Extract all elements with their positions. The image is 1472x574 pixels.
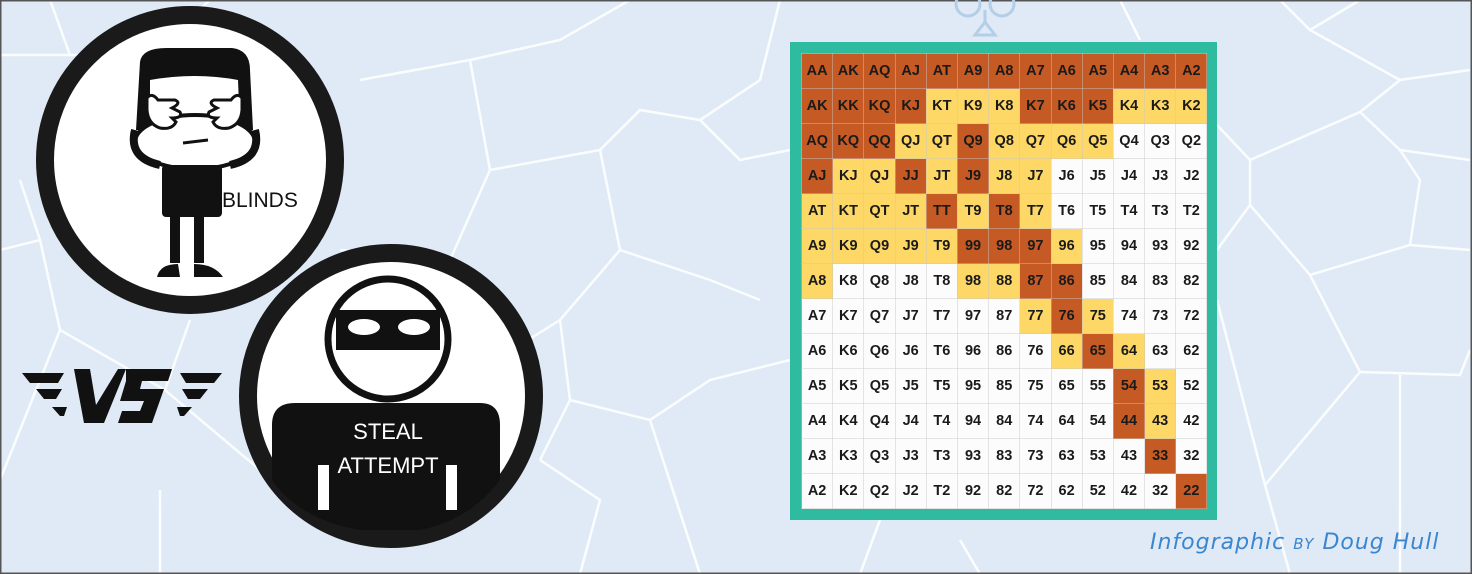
chart: starting hand range grid: T7 [933,308,950,324]
chart: starting hand range grid: 84 [996,413,1012,429]
chart: starting hand range grid: QJ [870,168,889,184]
chart: starting hand range grid: A8 [995,63,1013,79]
chart: starting hand range grid: 65 [1090,343,1106,359]
chart: starting hand range grid: 54 [1121,378,1137,394]
chart: starting hand range grid: 72 [1027,483,1043,499]
chart: starting hand range grid: A8 [808,273,826,289]
chart: starting hand range grid: J6 [903,343,919,359]
chart: starting hand range grid: 87 [996,308,1012,324]
credit: infographic by Doug Hull: Infographic BY Doug Hull [1150,530,1439,555]
chart: starting hand range grid: 75 [1090,308,1106,324]
chart: starting hand range grid: 98 [996,238,1012,254]
chart: starting hand range grid: AA [807,63,828,79]
chart: starting hand range grid: A4 [1120,63,1138,79]
chart: starting hand range grid: KT [932,98,952,114]
chart: starting hand range grid: Q3 [870,448,889,464]
chart: starting hand range grid: A2 [808,483,826,499]
chart: starting hand range grid: KJ [839,168,858,184]
chart: starting hand range grid: 32 [1183,448,1199,464]
chart: starting hand range grid: A7 [1026,63,1045,79]
chart: starting hand range grid: 53 [1152,378,1168,394]
chart: starting hand range grid: 66 [1059,343,1075,359]
chart: starting hand range grid: 72 [1183,308,1199,324]
chart: starting hand range grid: K4 [839,413,858,429]
chart: starting hand range grid: T7 [1027,203,1044,219]
chart: starting hand range grid: K5 [839,378,858,394]
chart: starting hand range grid: AQ [806,133,828,149]
chart: starting hand range grid: J7 [903,308,919,324]
chart: starting hand range grid: 86 [1059,273,1075,289]
chart: starting hand range grid: 33 [1152,448,1168,464]
chart: starting hand range grid: T4 [933,413,950,429]
chart: starting hand range grid: AQ [869,63,890,79]
chart: starting hand range grid: K7 [839,308,858,324]
chart: starting hand range grid: AT [808,203,826,219]
chart: starting hand range grid: 64 [1059,413,1075,429]
chart: starting hand range grid: 63 [1152,343,1168,359]
chart: starting hand range grid: 76 [1059,308,1075,324]
chart: starting hand range grid: 76 [1027,343,1043,359]
chart: starting hand range grid: J5 [1090,168,1106,184]
chart: starting hand range grid: 84 [1121,273,1137,289]
chart: starting hand range grid: 92 [1183,238,1199,254]
icon: masked robber [272,279,500,530]
chart: starting hand range grid: T8 [996,203,1013,219]
chart: starting hand range grid: 82 [1183,273,1199,289]
chart: starting hand range grid: KQ [869,98,890,114]
chart: starting hand range grid: Q3 [1150,133,1170,149]
chart: starting hand range grid: JT [902,203,919,219]
chart: starting hand range grid: 73 [1152,308,1168,324]
chart: starting hand range grid: T6 [1058,203,1075,219]
chart: starting hand range grid: 87 [1027,273,1043,289]
chart: starting hand range grid: 64 [1121,343,1137,359]
chart: starting hand range grid: 96 [965,343,981,359]
chart: starting hand range grid: Q4 [870,413,889,429]
chart: starting hand range grid: T2 [933,483,950,499]
chart: starting hand range grid: T9 [965,203,981,219]
chart: starting hand range grid: K9 [964,98,982,114]
chart: starting hand range grid: Q6 [870,343,889,359]
chart: starting hand range grid: 65 [1059,378,1075,394]
chart: starting hand range grid: K8 [839,273,858,289]
chart: starting hand range grid: J2 [1183,168,1199,184]
chart: starting hand range grid: A9 [808,238,826,254]
chart: starting hand range grid: 93 [1152,238,1168,254]
chart: starting hand range grid: 85 [996,378,1012,394]
chart: starting hand range grid: 62 [1183,343,1199,359]
chart: starting hand range grid: J7 [1027,168,1043,184]
chart: starting hand range grid: Q8 [995,133,1014,149]
icon: VS emblem [22,369,222,423]
chart: starting hand range grid: K7 [1026,98,1045,114]
chart: starting hand range grid: K2 [1182,98,1201,114]
chart: starting hand range grid: A7 [808,308,826,324]
chart: starting hand range grid: J4 [903,413,919,429]
label: BLINDS: BLINDS [222,189,298,212]
chart: starting hand range grid: J2 [903,483,919,499]
chart: starting hand range grid: JT [933,168,950,184]
chart: starting hand range grid: T8 [933,273,950,289]
chart: starting hand range grid: 86 [996,343,1012,359]
chart: starting hand range grid: T5 [933,378,950,394]
chart: starting hand range grid: K3 [1151,98,1169,114]
chart: starting hand range grid: Q7 [870,308,889,324]
chart: starting hand range grid: KT [839,203,858,219]
chart: starting hand range grid: J3 [903,448,919,464]
chart: starting hand range grid: 92 [965,483,981,499]
chart: starting hand range grid: J9 [965,168,981,184]
chart: starting hand range grid: K5 [1088,98,1107,114]
chart: starting hand range grid: 55 [1090,378,1106,394]
chart: starting hand range grid: T6 [933,343,950,359]
chart: starting hand range grid: Q2 [1182,133,1201,149]
chart: starting hand range grid: T4 [1120,203,1137,219]
chart: starting hand range grid: Q6 [1057,133,1076,149]
chart: starting hand range grid: J6 [1059,168,1075,184]
chart: starting hand range grid: A6 [1057,63,1076,79]
chart: starting hand range grid: A3 [1151,63,1169,79]
chart: starting hand range grid: T9 [933,238,950,254]
chart: starting hand range grid: 42 [1183,413,1199,429]
chart: starting hand range grid: AK [807,98,828,114]
chart: starting hand range grid: 83 [996,448,1012,464]
chart: starting hand range grid: Q9 [963,133,983,149]
chart: starting hand range grid: J9 [903,238,919,254]
chart: starting hand range grid: AJ [901,63,920,79]
chart: starting hand range grid: AK [838,63,859,79]
chart: starting hand range grid: 95 [965,378,981,394]
chart: starting hand range grid: 63 [1059,448,1075,464]
chart: starting hand range grid: QQ [868,133,891,149]
chart: starting hand range grid: K8 [995,98,1013,114]
chart: starting hand range grid: 99 [965,238,981,254]
chart: starting hand range grid [790,42,1217,520]
chart: starting hand range grid: 96 [1059,238,1075,254]
chart: starting hand range grid: 98 [965,273,981,289]
chart: starting hand range grid: 94 [965,413,981,429]
chart: starting hand range grid: A4 [808,413,826,429]
chart: starting hand range grid: KQ [837,133,859,149]
chart: starting hand range grid: Q5 [870,378,889,394]
chart: starting hand range grid: K9 [839,238,858,254]
chart: starting hand range grid: Q8 [870,273,889,289]
chart: starting hand range grid: 75 [1027,378,1043,394]
chart: starting hand range grid: 22 [1183,483,1199,499]
chart: starting hand range grid: 83 [1152,273,1168,289]
chart: starting hand range grid: J8 [903,273,919,289]
chart: starting hand range grid: A5 [808,378,826,394]
chart: starting hand range grid: 85 [1090,273,1106,289]
chart: starting hand range grid: 94 [1121,238,1137,254]
chart: starting hand range grid: Q2 [870,483,889,499]
label: STEAL ATTEMPT: ATTEMPT [337,453,439,478]
chart: starting hand range grid: T3 [933,448,950,464]
chart: starting hand range grid: A3 [808,448,826,464]
chart: starting hand range grid: A6 [808,343,826,359]
chart: starting hand range grid: K6 [839,343,858,359]
chart: starting hand range grid: 93 [965,448,981,464]
chart: starting hand range grid: JJ [903,168,919,184]
chart: starting hand range grid: 62 [1059,483,1075,499]
chart: starting hand range grid: 32 [1152,483,1168,499]
chart: starting hand range grid: 82 [996,483,1012,499]
label: STEAL ATTEMPT: STEAL [353,419,423,444]
chart: starting hand range grid: 77 [1027,308,1043,324]
chart: starting hand range grid: J8 [996,168,1012,184]
icon: club suit watermark [954,0,1016,36]
chart: starting hand range grid: 95 [1090,238,1106,254]
chart: starting hand range grid: 42 [1121,483,1137,499]
chart: starting hand range grid: KK [838,98,859,114]
chart: starting hand range grid: K2 [839,483,858,499]
chart: starting hand range grid: 53 [1090,448,1106,464]
chart: starting hand range grid: 43 [1152,413,1168,429]
chart: starting hand range grid: T5 [1089,203,1106,219]
chart: starting hand range grid: KJ [901,98,920,114]
chart: starting hand range grid: Q7 [1026,133,1045,149]
chart: starting hand range grid: 52 [1090,483,1106,499]
chart: starting hand range grid: J3 [1152,168,1168,184]
chart: starting hand range grid: 73 [1027,448,1043,464]
panel: steal attempt character [239,244,543,548]
chart: starting hand range grid: 44 [1121,413,1137,429]
chart: starting hand range grid: T2 [1183,203,1200,219]
chart: starting hand range grid: 74 [1121,308,1137,324]
chart: starting hand range grid: QT [869,203,890,219]
chart: starting hand range grid: A2 [1182,63,1201,79]
chart: starting hand range grid: A5 [1088,63,1107,79]
chart: starting hand range grid: A9 [964,63,982,79]
chart: starting hand range grid: K4 [1120,98,1138,114]
chart: starting hand range grid: AT [933,63,951,79]
panel: blinds character [36,6,344,314]
chart: starting hand range grid: K3 [839,448,858,464]
chart: starting hand range grid: Q9 [870,238,889,254]
chart: starting hand range grid: QT [932,133,952,149]
chart: starting hand range grid: 97 [965,308,981,324]
chart: starting hand range grid: TT [933,203,951,219]
chart: starting hand range grid: 97 [1027,238,1043,254]
chart: starting hand range grid: 43 [1121,448,1137,464]
chart: starting hand range grid: QJ [901,133,920,149]
chart: starting hand range grid: J5 [903,378,919,394]
chart: starting hand range grid: J4 [1121,168,1137,184]
chart: starting hand range grid: AJ [808,168,826,184]
chart: starting hand range grid: 74 [1027,413,1043,429]
chart: starting hand range grid: Q4 [1119,133,1139,149]
chart: starting hand range grid: 54 [1090,413,1106,429]
chart: starting hand range grid: K6 [1057,98,1076,114]
chart: starting hand range grid: Q5 [1088,133,1107,149]
chart: starting hand range grid: 52 [1183,378,1199,394]
chart: starting hand range grid: 88 [996,273,1012,289]
chart: starting hand range grid: T3 [1152,203,1169,219]
icon: blinds figure [134,48,256,277]
